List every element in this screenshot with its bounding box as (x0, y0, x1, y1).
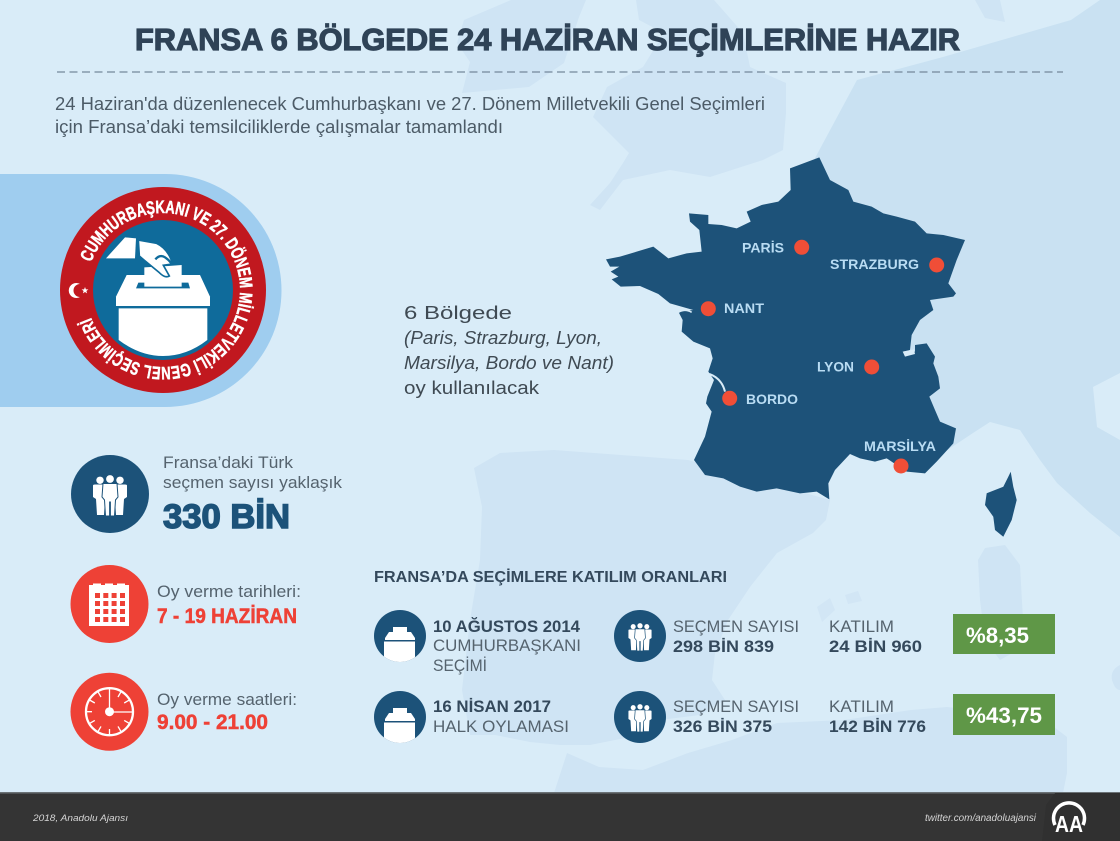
map label: Lyon (817, 359, 879, 375)
turnout badge 8.35: %8,35 (966, 623, 1029, 648)
row: 2014 presidential election: KATILIM (829, 617, 894, 636)
stat: voter count (71, 453, 343, 536)
panel: election badge (0, 174, 282, 407)
icon: AA logo (1053, 803, 1084, 837)
turnout badge 43.75 (953, 694, 1055, 735)
map label: Paris (742, 240, 809, 256)
icon: calendar (89, 584, 129, 626)
map label: Bordo: BORDO (746, 391, 798, 407)
row: 2017 referendum: KATILIM (829, 697, 894, 716)
icon: ballot box (374, 691, 426, 746)
stat: voter count: seçmen sayısı yaklaşık (163, 473, 343, 492)
map label: Marsilya (864, 438, 936, 474)
row: 2017 referendum: HALK OYLAMASI (433, 717, 569, 736)
row: 2017 referendum: 142 BİN 776 (829, 717, 926, 736)
heading: turnout table: FRANSA’DA SEÇİMLERE KATILIM ORANLARI (374, 569, 727, 586)
row: 2014 presidential election: 10 AĞUSTOS 2014 (433, 617, 581, 636)
icon: people (614, 610, 666, 662)
turnout badge 8.35 (953, 614, 1055, 654)
icon: people (614, 691, 666, 743)
row: 2014 presidential election (374, 610, 1055, 675)
map label: Nant (701, 300, 764, 316)
map label: Nant: NANT (724, 300, 764, 316)
row: 2014 presidential election: SEÇİMİ (433, 656, 487, 675)
badge circular text: CUMHURBAŞKANI VE 27. DÖNEM MİLLETVEKİLİ GENEL SEÇİMLERİ (76, 200, 254, 380)
map label: Paris: PARİS (742, 240, 784, 256)
map label: Strazburg: STRAZBURG (830, 256, 919, 272)
text: six regions: (Paris, Strazburg, Lyon, (404, 327, 602, 348)
icon: AA logo: AA (1055, 811, 1083, 837)
map: Corsica (985, 472, 1017, 537)
row: 2017 referendum: 326 BİN 375 (673, 717, 772, 736)
intro text: için Fransa’daki temsilciliklerde çalışmalar tamamlandı (55, 117, 503, 137)
turnout badge 43.75: %43,75 (966, 703, 1042, 728)
text: six regions: 6 Bölgede (404, 302, 512, 323)
title: FRANSA 6 BÖLGEDE 24 HAZİRAN SEÇİMLERİNE HAZIR (135, 22, 960, 57)
row: 2017 referendum: SEÇMEN SAYISI (673, 697, 799, 716)
icon: ballot box (374, 610, 426, 666)
text: six regions: Marsilya, Bordo ve Nant) (404, 352, 614, 373)
intro text: 24 Haziran'da düzenlenecek Cumhurbaşkanı ve 27. Dönem Milletvekili Genel Seçimleri (55, 94, 765, 114)
footer credit: 2018, Anadolu Ajansı (32, 813, 128, 824)
footer (0, 792, 1120, 841)
row: 2014 presidential election: CUMHURBAŞKANI (433, 636, 581, 655)
text: six regions: oy kullanılacak (404, 377, 540, 398)
stat: voting hours: Oy verme saatleri: (157, 690, 297, 709)
stat: voting hours: 9.00 - 21.00 (157, 711, 268, 734)
row: 2014 presidential election: SEÇMEN SAYISI (673, 617, 799, 636)
icon: turkish flag (69, 283, 88, 298)
map of France (606, 157, 1017, 537)
text: six regions (404, 302, 614, 398)
stat: voting dates (70, 565, 301, 643)
stat: voting dates: 7 - 19 HAZİRAN (157, 605, 297, 628)
intro text (55, 94, 765, 137)
row: 2017 referendum: 16 NİSAN 2017 (433, 697, 551, 716)
footer social: twitter.com/anadoluajansi (925, 813, 1037, 824)
icon: clock (86, 688, 133, 735)
row: 2014 presidential election: 298 BİN 839 (673, 637, 774, 656)
icon: people (93, 475, 127, 516)
stat: voter count: 330 BİN (163, 498, 290, 536)
icon: ballot box (106, 237, 210, 356)
row: 2017 referendum (374, 691, 1055, 746)
stat: voting dates: Oy verme tarihleri: (157, 582, 301, 601)
row: 2014 presidential election: 24 BİN 960 (829, 637, 922, 656)
map label: Marsilya: MARSİLYA (864, 438, 936, 454)
stat: voter count: Fransa’daki Türk (163, 453, 294, 472)
stat: voting hours (70, 673, 297, 751)
map label: Lyon: LYON (817, 359, 854, 375)
map label: Bordo (722, 391, 798, 407)
